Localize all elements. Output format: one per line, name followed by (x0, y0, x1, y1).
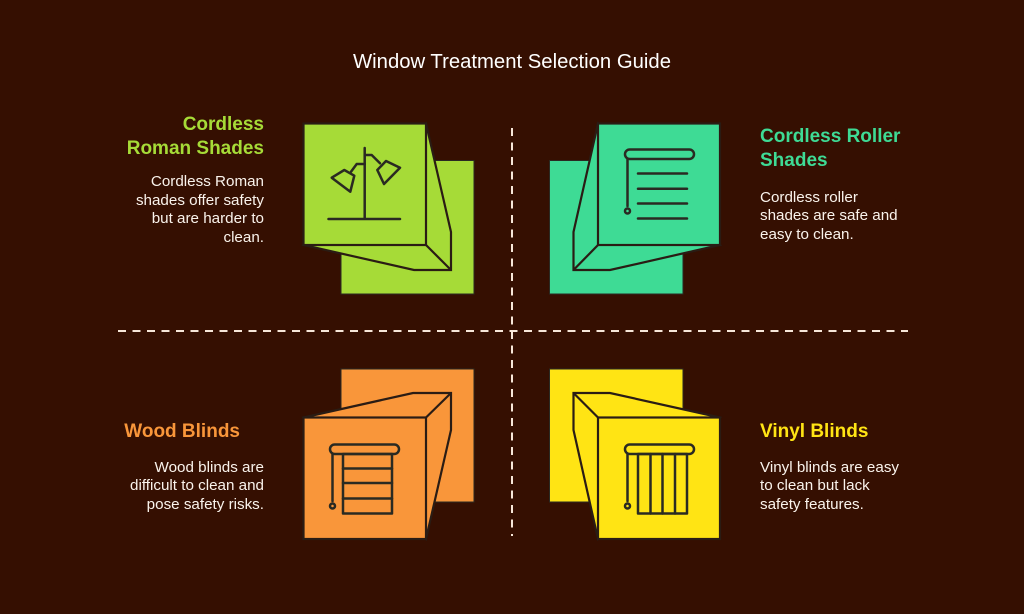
icon: floor lamp (328, 148, 400, 219)
title: Window Treatment Selection Guide (353, 51, 671, 73)
text: cordless roller description: shades are safe and (760, 207, 898, 224)
heading: vinyl blinds: Vinyl Blinds (760, 421, 868, 442)
text: wood blinds description: pose safety risks. (147, 496, 264, 513)
text: wood blinds description: difficult to clean and (130, 477, 264, 494)
block: teal cube (550, 124, 720, 294)
icon: roller shade (625, 150, 694, 218)
heading: cordless roller shades: Cordless Roller (760, 126, 901, 147)
block: yellow cube (550, 369, 720, 539)
text: cordless roller description: easy to clean. (760, 226, 854, 243)
block: green cube (304, 124, 474, 294)
text: cordless roller description: Cordless roller (760, 189, 858, 206)
text: cordless roman description: clean. (223, 229, 264, 246)
text: vinyl blinds description: safety features. (760, 496, 864, 513)
block: orange cube (304, 369, 474, 539)
text: wood blinds description: Wood blinds are (155, 459, 264, 476)
panel: cordless roman shades (127, 114, 474, 294)
text: vinyl blinds description: Vinyl blinds are easy (760, 459, 899, 476)
icon: wood blind (330, 444, 399, 514)
panel: cordless roller shades (550, 124, 901, 294)
panel: wood blinds (124, 369, 474, 539)
text: cordless roman description: Cordless Roman (151, 173, 264, 190)
icon: vinyl blind (625, 444, 694, 514)
quadrant axes (118, 128, 908, 536)
heading: wood blinds: Wood Blinds (124, 421, 240, 442)
heading: cordless roller shades: Shades (760, 150, 828, 171)
text: cordless roman description: but are harder to (152, 210, 264, 227)
text: vinyl blinds description: to clean but lack (760, 477, 870, 494)
panel: vinyl blinds (550, 369, 899, 539)
heading: cordless roman shades: Roman Shades (127, 138, 264, 159)
text: cordless roman description: shades offer safety (136, 192, 264, 209)
heading: cordless roman shades: Cordless (183, 114, 264, 135)
